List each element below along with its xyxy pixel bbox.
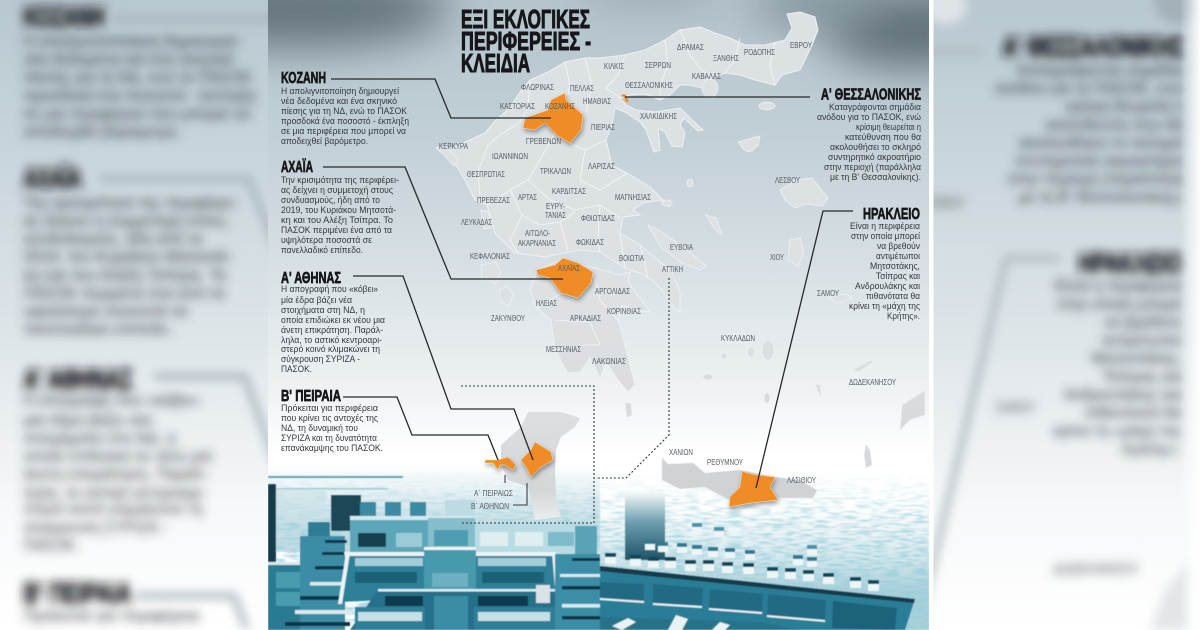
callout: Thessaloniki A: [817, 86, 921, 182]
map labels: ΗΜΑΘΙΑΣ: [583, 96, 611, 106]
blurred background copy of the infographic: Ανδρουλάκης και: [1064, 386, 1182, 404]
region: Piraeus A: [485, 457, 516, 470]
curved desk: [600, 566, 915, 630]
map labels: ΦΘΙΩΤΙΔΑΣ: [581, 213, 615, 223]
blurred background copy of the infographic: κη και του Αλέξη Τσίπρα. Το: [23, 266, 227, 284]
map labels: ΚΑΒΑΛΑΣ: [692, 71, 721, 81]
callout: Heraklion: ΗΡΑΚΛΕΙΟ: [863, 206, 920, 223]
title: [462, 9, 591, 72]
callout: Athens A: Η απογραφή που «κόβει»: [281, 284, 378, 294]
callout: Achaia: 2019, του Κυριάκου Μητσοτά-: [281, 205, 396, 215]
Peloponnese: [530, 260, 650, 392]
callout: Achaia: [281, 158, 399, 255]
map labels: ΑΤΤΙΚΗ: [662, 264, 683, 274]
map labels: ΠΡΕΒΕΖΑΣ: [477, 195, 510, 205]
map labels: ΜΑΓΝΗΣΙΑΣ: [615, 192, 651, 202]
blurred background copy of the infographic: Τσίπρας και: [1102, 368, 1182, 386]
callout: Heraklion: πιθανότατα θα: [866, 291, 920, 301]
map labels: ΚΕΦΑΛΟΝΙΑΣ: [470, 251, 510, 261]
callout: Piraeus B: [281, 388, 383, 453]
map labels: ΑΡΓΟΛΙΔΑΣ: [595, 286, 630, 296]
map labels: ΚΕΡΚΥΡΑ: [439, 141, 468, 151]
desk seats: [605, 523, 879, 591]
map labels: ΒΟΙΩΤΙΑ: [619, 253, 644, 263]
map labels: Β΄ ΑΘΗΝΩΝ: [471, 501, 509, 511]
map labels: ΣΑΜΟΥ: [817, 288, 839, 298]
map labels: ΣΕΡΡΩΝ: [645, 60, 671, 70]
blurred background copy of the infographic: Είναι η περιφέρεια: [1055, 277, 1182, 295]
map of Greece: [436, 12, 925, 523]
callout: Piraeus B: επανάκαμψης του ΠΑΣΟΚ.: [281, 443, 383, 453]
blurred background copy of the infographic: Μητσοτάκης,: [1091, 350, 1182, 368]
map labels: ΕΥΡΥ-: [546, 201, 565, 211]
callout: Heraklion: Κρήτης».: [887, 311, 920, 321]
callout: Heraklion: Ανδρουλάκης και: [855, 281, 920, 291]
map labels: ΧΙΟΥ: [770, 252, 784, 262]
blurred background copy of the infographic: αποδειχθεί βαρόμετρο.: [23, 123, 181, 141]
blurred background copy of the infographic: αντιμέτωποι: [1102, 332, 1182, 350]
callout: Heraklion: Είναι η περιφέρεια: [850, 221, 920, 231]
blurred background copy of the infographic: 2019, του Κυριάκου Μητσοτά-: [23, 248, 232, 266]
leader lines: [323, 79, 853, 488]
blurred background copy of the infographic: στην περιοχή (παράλληλα: [1008, 170, 1184, 188]
blurred background copy of the infographic: ΠΑΣΟΚ.: [23, 536, 80, 554]
callout: Kozani: [281, 70, 409, 146]
map labels: ΤΡΙΚΑΛΩΝ: [540, 166, 571, 176]
map labels: ΚΑΡΔΙΤΣΑΣ: [552, 186, 586, 196]
callout: Athens A: οποία επιδιώκει εκ νέου μια: [281, 315, 385, 325]
blurred background copy of the infographic: Α' ΑΘΗΝΑΣ: [23, 364, 132, 396]
callout: Athens A: [281, 270, 385, 374]
blurred background copy of the infographic: ανόδου για το ΠΑΣΟΚ, ενώ: [995, 80, 1184, 98]
map labels: ΔΩΔΕΚΑΝΗΣΟΥ: [849, 377, 896, 387]
dotted inset frames: [461, 278, 669, 523]
map labels: ΛΕΥΚΑΔΑΣ: [461, 217, 492, 227]
callout: Thessaloniki A: κρίσιμη θεωρείται η: [856, 122, 921, 132]
blurred background copy of the infographic: πίεσης για τη ΝΔ, ενώ το ΠΑΣΟΚ: [23, 69, 252, 87]
callout: Heraklion: να βρεθούν: [877, 241, 920, 251]
photo: parliament chamber: [268, 462, 930, 630]
callout: Kozani: ΚΟΖΑΝΗ: [281, 70, 326, 87]
callout: Thessaloniki A: ακολουθήσει το σκληρό: [830, 142, 921, 152]
blurred background copy of the infographic: στοιχήματα στη ΝΔ, η: [23, 429, 176, 447]
map labels: ΖΑΚΥΝΘΟΥ: [491, 313, 525, 323]
blurred background copy of the infographic: να βρεθούν: [1104, 313, 1182, 331]
callout: Athens A: Α' ΑΘΗΝΑΣ: [281, 270, 341, 287]
blurred background copy of the infographic: νέα δεδομένα και ένα σκηνικό: [23, 51, 234, 69]
map labels: ΤΑΝΙΑΣ: [545, 210, 566, 220]
map labels: ΔΡΑΜΑΣ: [677, 42, 704, 52]
map labels: [439, 40, 896, 511]
map labels: ΠΙΕΡΙΑΣ: [591, 122, 615, 132]
map labels: ΗΛΕΙΑΣ: [536, 298, 557, 308]
callout: Piraeus B: Β' ΠΕΙΡΑΙΑ: [281, 388, 341, 405]
map labels: ΠΕΛΛΑΣ: [570, 83, 594, 93]
map labels: ΦΛΩΡΙΝΑΣ: [521, 82, 554, 92]
map labels: ΕΒΡΟΥ: [790, 40, 812, 50]
infographic panel: [268, 0, 929, 630]
callout: Piraeus B: που κρίνει τις αντοχές της: [281, 413, 379, 423]
callout: Heraklion: Τσίπρας και: [876, 271, 920, 281]
callout: Achaia: συνδυασμούς, ήδη από το: [281, 195, 380, 205]
blurred background copy of the infographic: Η απολιγνιτοποίηση δημιουργεί: [23, 32, 238, 50]
callout: Thessaloniki A: ανόδου για το ΠΑΣΟΚ, ενώ: [817, 112, 921, 122]
callout: Heraklion: αντιμέτωποι: [876, 251, 920, 261]
front desk: [350, 585, 562, 630]
callout: Thessaloniki A: συντηρητικό ακροατήριο: [828, 152, 921, 162]
map labels: ΑΙΤΩΛΟ-: [525, 228, 550, 238]
title: ΠΕΡΙΦΕΡΕΙΕΣ -: [461, 26, 591, 56]
callout: Athens A: στερό κοινό κλιμακώνει τη: [281, 344, 380, 354]
callout: Kozani: νέα δεδομένα και ένα σκηνικό: [281, 96, 397, 106]
region: Kozani: [523, 93, 583, 143]
map labels: ΘΕΣΠΡΩΤΙΑΣ: [467, 169, 505, 179]
map labels: ΙΩΑΝΝΙΝΩΝ: [492, 151, 528, 161]
podium desk: [350, 516, 475, 554]
callout: Athens A: μία έδρα βάζει νέα: [281, 295, 352, 305]
blurred background copy of the infographic: ΑΧΑΪΑ: [23, 162, 82, 195]
Crete: [662, 458, 817, 500]
blurred background copy of the infographic: άνετη επικράτηση. Παράλ-: [23, 466, 208, 484]
callout: Athens A: σύγκρουση ΣΥΡΙΖΑ -: [281, 354, 360, 364]
callout: Athens A: στοιχήματα στη ΝΔ, η: [281, 305, 365, 315]
blurred background copy of the infographic: ακολουθήσει το σκληρό: [1019, 134, 1184, 152]
blurred background copy of the infographic: στερό κοινό κλιμακώνει τη: [23, 500, 203, 518]
islands: [436, 79, 925, 468]
blurred background copy of the infographic: Η απογραφή που «κόβει»: [23, 391, 199, 409]
title: ΕΞΙ ΕΚΛΟΓΙΚΕΣ: [461, 4, 590, 34]
region: Thessaloniki A: [621, 94, 629, 102]
region: Achaia: [536, 258, 593, 298]
region borders: [478, 30, 775, 350]
callout: Athens A: ΠΑΣΟΚ.: [281, 364, 312, 374]
callout: Kozani: Η απολιγνιτοποίηση δημιουργεί: [281, 86, 399, 96]
map labels: ΑΡΚΑΔΙΑΣ: [570, 313, 601, 323]
blurred background copy of the infographic: μία έδρα βάζει νέα: [23, 411, 152, 429]
title: ΚΛΕΙΔΙΑ: [461, 48, 530, 78]
blurred background copy of the infographic: ΣΑΜΟΥ: [995, 400, 1035, 417]
callout: Achaia: ας δείχνει η συμμετοχή στους: [281, 185, 394, 195]
blurred background copy of the infographic: ΚΟΖΑΝΗ: [23, 1, 105, 33]
map labels: ΛΑΡΙΣΑΣ: [588, 161, 615, 171]
blurred background copy of the infographic: ληλα, το αστικό κεντροαρι-: [23, 484, 207, 502]
map labels: ΑΡΤΑΣ: [518, 192, 537, 202]
callout: Thessaloniki A: Α' ΘΕΣΣΑΛΟΝΙΚΗΣ: [821, 86, 921, 104]
map labels: ΚΙΛΚΙΣ: [604, 61, 624, 71]
central desk: [338, 547, 560, 604]
map labels: ΘΕΣΣΑΛΟΝΙΚΗΣ: [625, 80, 673, 90]
callout: Thessaloniki A: κατεύθυνση που θα: [845, 132, 921, 142]
map labels: ΚΟΖΑΝΗΣ: [545, 101, 575, 111]
callout: Kozani: αποδειχθεί βαρόμετρο.: [281, 136, 368, 146]
blurred background copy of the infographic: Β' ΠΕΙΡΑΙΑ: [23, 578, 132, 610]
callout: Thessaloniki A: με τη Β' Θεσσαλονίκης).: [830, 172, 921, 182]
callout: Thessaloniki A: στην περιοχή (παράλληλα: [824, 162, 921, 172]
map labels: ΕΥΒΟΙΑ: [670, 242, 693, 252]
callout: Heraklion: στην οποία μπορεί: [851, 231, 920, 241]
map labels: ΛΕΣΒΟΥ: [775, 175, 800, 185]
map labels: ΜΕΣΣΗΝΙΑΣ: [546, 344, 581, 354]
callout: Kozani: προσδοκά ένα ποσοστό - έκπληξη: [281, 116, 409, 126]
map labels: ΡΟΔΟΠΗΣ: [744, 47, 775, 57]
callout: Athens A: άνετη επικράτηση. Παράλ-: [281, 325, 383, 335]
right stairs: [555, 554, 600, 630]
blurred background copy of the infographic: Κρήτης».: [1122, 440, 1182, 458]
blurred background copy of the infographic: συντηρητικό ακροατήριο: [1015, 152, 1184, 170]
callout: Achaia: ΠΑΣΟΚ περιμένει ένα από τα: [281, 225, 392, 235]
callout: Achaia: Την κρισιμότητα της περιφέρει-: [281, 175, 399, 185]
map labels: ΦΩΚΙΔΑΣ: [576, 237, 604, 247]
blurred background copy of the infographic: υψηλότερα ποσοστά σε: [23, 303, 188, 321]
callout: Athens A: ληλα, το αστικό κεντροαρι-: [281, 335, 382, 345]
inset: Attica: [501, 412, 580, 520]
callout: Achaia: πανελλαδικό επίπεδο.: [281, 245, 363, 255]
callout: Piraeus B: ΝΔ, τη δυναμική του: [281, 423, 358, 433]
callout: Heraklion: Μητσοτάκης,: [870, 261, 920, 271]
callout: Achaia: κη και του Αλέξη Τσίπρα. Το: [281, 215, 393, 225]
blurred background copy of the infographic: ΛΕΣΒΟΥ: [919, 195, 964, 212]
blurred background copy of the infographic: με τη Β' Θεσσαλονίκης).: [1019, 188, 1184, 206]
blurred background copy of the infographic: συνδυασμούς, ήδη από το: [23, 230, 203, 248]
map labels: ΞΑΝΘΗΣ: [713, 53, 739, 63]
left benches and stairs: [268, 522, 350, 630]
callout: Piraeus B: Πρόκειται για περιφέρεια: [281, 403, 378, 413]
blurred background copy of the infographic: ΠΑΣΟΚ περιμένει ένα από τα: [23, 284, 225, 302]
blurred background copy of the infographic: κρίνει τη «μάχη της: [1053, 422, 1182, 440]
map labels: Α΄ ΠΕΙΡΑΙΩΣ: [474, 488, 513, 498]
map labels: ΑΚΑΡΝΑΝΙΑΣ: [518, 238, 556, 248]
region: Athens B: [521, 442, 553, 477]
blurred background copy of the infographic: Καταγράφονται σημάδια: [1017, 61, 1184, 79]
blurred background copy of the infographic: ΔΩΔΕΚΑΝΗΣΟΥ: [1053, 561, 1138, 578]
callout: Kozani: σε μια περιφέρεια που μπορεί να: [281, 126, 406, 136]
callout: Heraklion: [849, 206, 921, 321]
region: Heraklion: [729, 471, 778, 507]
blurred background copy of the infographic: πανελλαδικό επίπεδο.: [23, 321, 172, 339]
blurred background copy of the infographic: ας δείχνει η συμμετοχή στους: [23, 212, 227, 230]
map labels: ΚΑΣΤΟΡΙΑΣ: [500, 101, 535, 111]
map labels: ΛΑΣΙΘΙΟΥ: [787, 475, 816, 485]
blurred background copy of the infographic: Πρόκειται για περιφέρεια: [23, 607, 199, 625]
map labels: ΧΑΛΚΙΔΙΚΗΣ: [640, 111, 677, 121]
map labels: ΛΑΚΩΝΙΑΣ: [592, 356, 626, 366]
mainland: [448, 12, 818, 312]
blurred background copy of the infographic: πιθανότατα θα: [1084, 404, 1182, 422]
callout: Kozani: πίεσης για τη ΝΔ, ενώ το ΠΑΣΟΚ: [281, 106, 407, 116]
map labels: ΚΥΚΛΑΔΩΝ: [721, 333, 755, 343]
map labels: ΡΕΘΥΜΝΟΥ: [707, 457, 743, 467]
callout: Heraklion: κρίνει τη «μάχη της: [849, 301, 921, 311]
inset label ticks: [505, 475, 527, 505]
blurred background copy of the infographic: σύγκρουση ΣΥΡΙΖΑ -: [23, 518, 167, 536]
callout: Achaia: υψηλότερα ποσοστά σε: [281, 235, 372, 245]
map labels: ΑΧΑΪΑΣ: [558, 263, 580, 273]
blurred background copy of the infographic: σε μια περιφέρεια που μπορεί να: [23, 105, 250, 123]
blurred background copy of the infographic: προσδοκά ένα ποσοστό - έκπληξη: [23, 87, 256, 105]
blurred background copy of the infographic: κατεύθυνση που θα: [1046, 116, 1184, 134]
blurred background copy of the infographic: οποία επιδιώκει εκ νέου μια: [23, 448, 212, 466]
callout: Achaia: ΑΧΑΪΑ: [281, 158, 313, 176]
callout: Piraeus B: ΣΥΡΙΖΑ και τη δυνατότητα: [281, 433, 377, 443]
map labels: ΚΟΡΙΝΘΙΑΣ: [607, 306, 641, 316]
map labels: ΧΑΝΙΩΝ: [669, 447, 693, 457]
blurred background copy of the infographic: Την κρισιμότητα της περιφέρει-: [23, 194, 237, 212]
map labels: ΓΡΕΒΕΝΩΝ: [526, 136, 561, 146]
blurred background copy of the infographic: στην οποία μπορεί: [1057, 295, 1182, 313]
callout: Thessaloniki A: Καταγράφονται σημάδια: [829, 102, 921, 112]
